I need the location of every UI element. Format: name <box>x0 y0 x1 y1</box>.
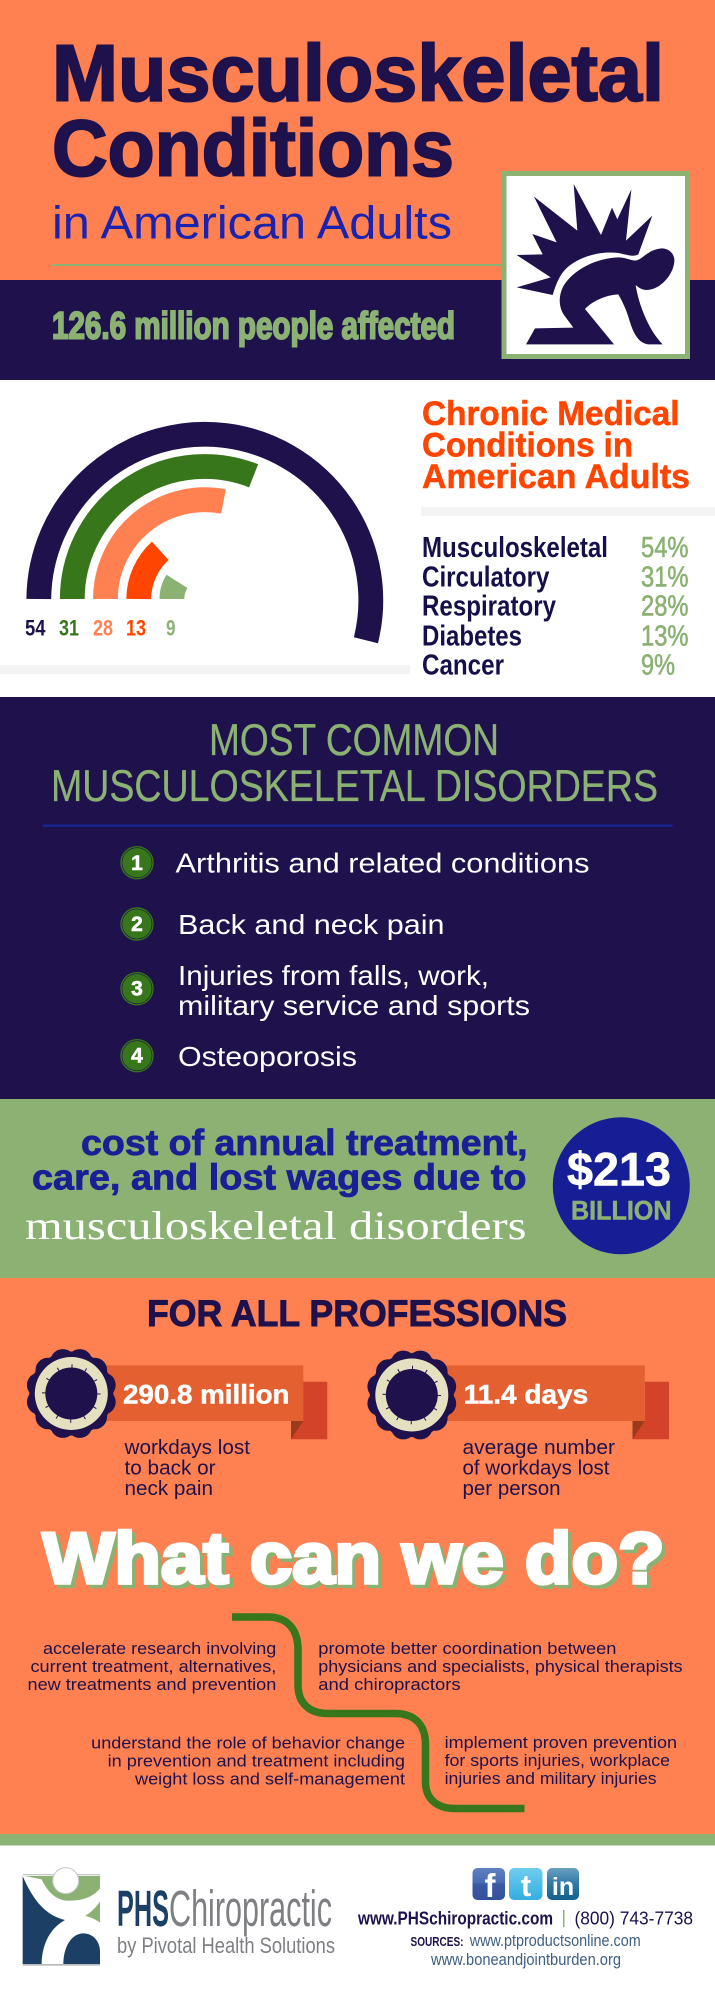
heading: most common disorders: MOST COMMON <box>209 716 499 765</box>
heading: what can we do: What can we do? <box>42 1519 664 1599</box>
stat: average days lost <box>367 1351 669 1500</box>
action: accelerate research: accelerate research involving <box>43 1639 276 1658</box>
callout: $213 billion: BILLION <box>571 1195 672 1225</box>
logo wordmark <box>117 1880 335 1958</box>
chart value labels: 54 <box>25 616 46 640</box>
logo wordmark: Chiropractic <box>169 1880 332 1937</box>
logo mark <box>23 1868 100 1966</box>
action: proven prevention <box>445 1733 677 1788</box>
action: behavior change: in prevention and treatment including <box>108 1752 405 1771</box>
sources: SOURCES: <box>410 1935 464 1949</box>
item 1: arthritis: 1 <box>131 852 143 875</box>
action: better coordination: and chiropractors <box>318 1675 461 1694</box>
heading: chronic medical conditions <box>422 395 690 496</box>
heading: for all professions: FOR ALL PROFESSIONS <box>147 1293 567 1334</box>
stat: average days lost: 11.4 days <box>464 1379 588 1409</box>
action: proven prevention: for sports injuries, workplace <box>445 1751 670 1770</box>
title: Musculoskeletal <box>52 28 664 118</box>
action: behavior change <box>91 1734 405 1788</box>
headline stat: 126.6 million people affected <box>52 306 455 348</box>
stat: workdays lost: to back or <box>124 1458 216 1480</box>
icons: social media: t <box>521 1868 531 1903</box>
chart value labels <box>25 616 176 640</box>
condition percentages: 28% <box>641 591 688 623</box>
condition names: Musculoskeletal <box>422 532 608 564</box>
stat: average days lost: average number <box>462 1437 615 1459</box>
action: accelerate research: current treatment, alternatives, <box>30 1657 276 1676</box>
item 3: injuries: military service and sports <box>178 990 530 1021</box>
action: better coordination <box>318 1639 683 1694</box>
contact details <box>357 1907 693 1928</box>
item 4: osteoporosis: 4 <box>131 1045 143 1068</box>
condition percentages: 54% <box>641 532 688 564</box>
connector: green s-curve <box>232 1617 524 1808</box>
logo wordmark: by Pivotal Health Solutions <box>117 1933 335 1958</box>
condition percentages: 31% <box>641 561 688 593</box>
radial bar chart <box>39 434 371 640</box>
condition percentages <box>641 532 688 682</box>
condition names: Circulatory <box>422 561 550 593</box>
condition names <box>422 532 608 682</box>
action: behavior change: understand the role of behavior change <box>91 1734 405 1753</box>
panel: for all professions <box>0 1278 715 1834</box>
item 2: back and neck pain: 2 <box>131 913 143 936</box>
callout: $213 billion: $213 <box>567 1143 671 1196</box>
cost description: cost of annual treatment, <box>81 1122 528 1163</box>
stat: workdays lost <box>27 1349 327 1500</box>
action: better coordination: physicians and specialists, physical therapists <box>318 1657 683 1676</box>
panel: header <box>0 0 715 380</box>
contact details: www.PHSchiropractic.com <box>357 1907 553 1928</box>
sources: www.ptproductsonline.com <box>469 1931 641 1950</box>
panel: chronic medical conditions <box>0 380 715 697</box>
icons: social media: f <box>484 1867 496 1904</box>
condition names: Cancer <box>422 650 504 682</box>
panel: most common disorders <box>0 697 715 1099</box>
item 1: arthritis: Arthritis and related conditions <box>176 848 590 879</box>
logo wordmark: PHS <box>117 1880 169 1937</box>
condition names: Respiratory <box>422 591 556 623</box>
stat: average days lost: of workdays lost <box>462 1458 610 1480</box>
action: better coordination: promote better coordination between <box>318 1639 616 1658</box>
sources: www.boneandjointburden.org <box>430 1950 621 1969</box>
cost subject: musculoskeletal disorders <box>25 1203 526 1248</box>
callout: $213 billion <box>553 1117 690 1254</box>
cost description: care, and lost wages due to <box>32 1156 526 1197</box>
condition percentages: 13% <box>641 620 688 652</box>
action: proven prevention: injuries and military injuries <box>445 1769 657 1788</box>
sources <box>410 1931 641 1969</box>
icons: social media: in <box>552 1873 574 1901</box>
condition names: Diabetes <box>422 620 522 652</box>
title: Conditions <box>52 104 454 192</box>
heading: chronic medical conditions: American Adults <box>422 458 690 496</box>
heading: most common disorders <box>51 716 658 811</box>
chart value labels: 28 <box>93 616 113 640</box>
cost description <box>32 1122 528 1197</box>
heading: chronic medical conditions: Chronic Medical <box>422 395 680 433</box>
chart value labels: 31 <box>59 616 79 640</box>
item 3: injuries: 3 <box>131 978 143 1001</box>
heading: chronic medical conditions: Conditions in <box>422 426 633 464</box>
action: accelerate research: new treatments and prevention <box>28 1675 276 1694</box>
stat: workdays lost: workdays lost <box>123 1437 250 1459</box>
subtitle: in American Adults <box>52 196 452 248</box>
action: proven prevention: implement proven prevention <box>445 1733 677 1752</box>
stat: workdays lost: 290.8 million <box>123 1379 290 1409</box>
item 2: back and neck pain: Back and neck pain <box>178 909 444 940</box>
item 4: osteoporosis <box>121 1039 357 1072</box>
item 3: injuries <box>121 960 530 1021</box>
chart value labels: 13 <box>126 616 146 640</box>
title <box>52 28 664 192</box>
stat: average days lost: per person <box>462 1478 560 1500</box>
item 3: injuries: Injuries from falls, work, <box>178 960 489 991</box>
condition percentages: 9% <box>641 650 675 682</box>
action: behavior change: weight loss and self-management <box>134 1769 405 1788</box>
contact details: (800) 743-7738 <box>574 1907 693 1928</box>
panel: footer <box>0 1834 715 1989</box>
stat: workdays lost: neck pain <box>124 1478 213 1500</box>
action: accelerate research <box>28 1639 276 1694</box>
chart value labels: 9 <box>166 616 176 640</box>
item 4: osteoporosis: Osteoporosis <box>178 1041 357 1072</box>
icon: person with back pain <box>504 174 688 356</box>
icons: social media <box>472 1867 579 1904</box>
panel: annual cost <box>0 1099 715 1278</box>
heading: what can we do: What can we do? <box>46 1522 668 1602</box>
